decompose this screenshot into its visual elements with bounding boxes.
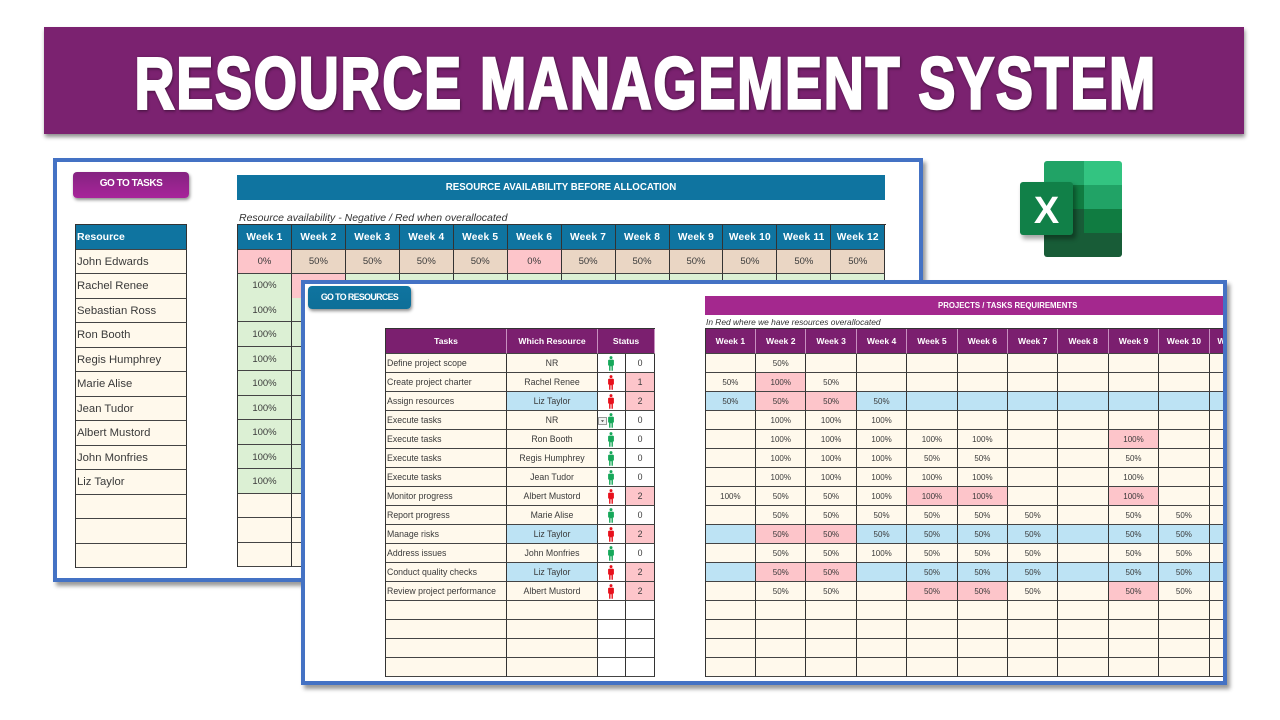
table: weekly task requirements: 50% [1025, 568, 1041, 577]
table: resource names: Resource [77, 231, 125, 243]
table: weekly availability: Week 12 [837, 232, 879, 243]
table: tasks, resources and status: NR [546, 358, 558, 368]
table: weekly availability: Week 10 [729, 232, 771, 243]
table: tasks, resources and status: 0 [638, 358, 642, 368]
table: tasks, resources and status: 0 [638, 453, 642, 463]
table: tasks, resources and status: 2 [638, 586, 642, 596]
table: weekly task requirements: 50% [773, 530, 789, 539]
table: weekly task requirements: Week 9 [1119, 336, 1148, 346]
table: weekly task requirements: 50% [773, 549, 789, 558]
table: weekly task requirements: 50% [773, 511, 789, 520]
table: weekly task requirements: 50% [1126, 530, 1142, 539]
table: weekly availability: 50% [633, 256, 652, 267]
table: weekly task requirements: 50% [823, 378, 839, 387]
table: weekly task requirements: 100% [871, 435, 892, 444]
table: weekly availability lower rows [237, 298, 346, 567]
table: tasks, resources and status: Liz Taylor [534, 396, 570, 406]
table: weekly task requirements: 50% [823, 492, 839, 501]
table: weekly availability: Week 5 [462, 232, 498, 243]
table: weekly task requirements: 100% [1123, 492, 1144, 501]
heading: projects and tasks requirements [705, 296, 1225, 315]
table: weekly availability: 50% [848, 256, 867, 267]
table: weekly task requirements: 100% [771, 416, 791, 425]
table: weekly task requirements: 100% [771, 435, 791, 444]
table: weekly availability: 50% [309, 256, 328, 267]
table: weekly availability: 50% [740, 256, 759, 267]
table: tasks, resources and status: 2 [638, 529, 642, 539]
table: weekly task requirements: 100% [972, 435, 993, 444]
table: weekly task requirements: 100% [871, 454, 892, 463]
table: weekly task requirements: 50% [924, 511, 940, 520]
table: weekly task requirements: 50% [1176, 587, 1192, 596]
table: resource names: Liz Taylor [77, 476, 125, 488]
table: weekly task requirements: 50% [974, 454, 990, 463]
table: weekly availability: Week 9 [678, 232, 714, 243]
table: tasks, resources and status: Monitor progress [387, 491, 453, 501]
table: weekly availability: 50% [363, 256, 382, 267]
table: weekly task requirements: 50% [924, 454, 940, 463]
table: weekly task requirements: 50% [1126, 511, 1142, 520]
table: tasks, resources and status: 0 [638, 415, 642, 425]
table: weekly task requirements: 100% [821, 435, 841, 444]
table: weekly availability: Week 4 [408, 232, 444, 243]
table: weekly availability: Week 11 [783, 232, 825, 243]
table: weekly availability lower rows: 100% [252, 452, 277, 463]
table: weekly task requirements: 50% [924, 530, 940, 539]
table: weekly task requirements: 100% [821, 416, 841, 425]
table: tasks, resources and status: Report progress [387, 510, 450, 520]
table: weekly task requirements: 50% [974, 511, 990, 520]
heading: resource availability before allocation [237, 175, 885, 200]
table: tasks, resources and status: NR [546, 415, 558, 425]
table: weekly task requirements: Week 5 [917, 336, 947, 346]
table: weekly availability: Week 6 [516, 232, 552, 243]
table: resource names [75, 224, 187, 568]
table: tasks, resources and status: 0 [638, 434, 642, 444]
table: weekly availability lower rows: 100% [252, 354, 277, 365]
table: tasks, resources and status: Liz Taylor [534, 529, 570, 539]
table: resource names: John Monfries [77, 452, 148, 464]
table: weekly task requirements: 50% [1126, 587, 1142, 596]
table: tasks, resources and status: Tasks [434, 336, 458, 346]
table: weekly task requirements: 50% [924, 568, 940, 577]
table: tasks, resources and status: Marie Alise [531, 510, 573, 520]
table: weekly availability lower rows: 100% [252, 403, 277, 414]
table: weekly availability lower rows: 100% [252, 305, 277, 316]
table: weekly availability lower rows: 100% [252, 427, 277, 438]
table: tasks, resources and status: Manage risks [387, 529, 439, 539]
table: weekly availability: 50% [471, 256, 490, 267]
title: RESOURCE MANAGEMENT SYSTEM [134, 42, 1157, 124]
table: resource names: Rachel Renee [77, 280, 149, 292]
icon: Excel logo [1019, 161, 1122, 257]
table: resource names: Jean Tudor [77, 403, 134, 415]
table: resource names: Albert Mustord [77, 427, 150, 439]
table: tasks, resources and status: Execute tasks [387, 472, 441, 482]
table: weekly task requirements: 50% [773, 587, 789, 596]
table: weekly task requirements: Week 1 [716, 336, 745, 346]
table: weekly task requirements: 50% [1176, 549, 1192, 558]
table: tasks, resources and status: Assign resources [387, 396, 454, 406]
table: tasks, resources and status: Liz Taylor [534, 567, 570, 577]
table: weekly task requirements: 50% [1126, 454, 1142, 463]
table: weekly task requirements: 100% [972, 492, 993, 501]
table: weekly availability: Week 7 [570, 232, 606, 243]
table: tasks, resources and status: Define project scope [387, 358, 467, 368]
table: tasks, resources and status: Albert Mustord [524, 586, 580, 596]
table: weekly availability: Week 3 [354, 232, 390, 243]
table: tasks, resources and status: Jean Tudor [530, 472, 574, 482]
heading: projects and tasks requirements: PROJECTS / TASKS REQUIREMENTS [938, 301, 1077, 310]
table: weekly task requirements: 100% [771, 473, 791, 482]
table: tasks, resources and status: Which Resource [518, 336, 586, 346]
table: weekly task requirements: 50% [924, 549, 940, 558]
table: weekly task requirements: 100% [871, 549, 892, 558]
table: weekly task requirements: 50% [974, 568, 990, 577]
table: weekly task requirements: Week 2 [766, 336, 796, 346]
table: weekly task requirements: 100% [972, 473, 993, 482]
table: weekly availability: 50% [579, 256, 598, 267]
table: weekly task requirements: Week 4 [867, 336, 896, 346]
table: weekly task requirements: Week 7 [1018, 336, 1047, 346]
icon: dropdown arrow [598, 417, 607, 425]
table: weekly task requirements: 50% [823, 397, 839, 406]
table: weekly task requirements: 50% [773, 492, 789, 501]
table: weekly task requirements: 50% [773, 397, 789, 406]
table: weekly task requirements: 50% [823, 587, 839, 596]
table: weekly task requirements: 50% [823, 511, 839, 520]
table: weekly availability: 50% [686, 256, 705, 267]
table: weekly task requirements: 100% [771, 378, 791, 387]
table: weekly availability: Week 2 [300, 232, 336, 243]
table: tasks, resources and status: John Monfries [525, 548, 579, 558]
table: weekly task requirements: 50% [974, 549, 990, 558]
table: weekly task requirements: Week 8 [1068, 336, 1098, 346]
heading: resource availability before allocation: RESOURCE AVAILABILITY BEFORE ALLOCATION [446, 182, 676, 193]
table: tasks, resources and status: Ron Booth [531, 434, 573, 444]
table: weekly availability: Week 1 [246, 232, 283, 243]
table: weekly task requirements: 100% [1123, 473, 1144, 482]
table: weekly task requirements: Week 3 [816, 336, 846, 346]
table: tasks, resources and status: 0 [638, 548, 642, 558]
table: weekly task requirements: 50% [773, 359, 789, 368]
table: tasks, resources and status: Rachel Renee [524, 377, 580, 387]
table: weekly task requirements: 50% [974, 530, 990, 539]
note: red explanation: In Red where we have resources overallocated [706, 317, 881, 327]
table: tasks, resources and status: Execute tasks [387, 415, 441, 425]
table: weekly task requirements: 50% [974, 587, 990, 596]
table: resource names: Regis Humphrey [77, 354, 161, 366]
table: weekly availability: 0% [527, 256, 541, 267]
table: weekly availability: 100% [252, 280, 277, 291]
table: weekly task requirements: 100% [922, 492, 942, 501]
button: go to resources: GO TO RESOURCES [321, 292, 398, 302]
table: tasks, resources and status: Conduct quality checks [387, 567, 477, 577]
table: weekly task requirements: 100% [821, 454, 841, 463]
table: tasks, resources and status: Status [613, 336, 639, 346]
table: weekly task requirements: 50% [1025, 511, 1041, 520]
table: tasks, resources and status: Execute tasks [387, 434, 441, 444]
table: tasks, resources and status: 0 [638, 472, 642, 482]
table: resource names: Ron Booth [77, 329, 130, 341]
table: weekly task requirements: 50% [1126, 568, 1142, 577]
table: weekly task requirements: 50% [924, 587, 940, 596]
note: availability explanation: Resource availability - Negative / Red when overallocated [239, 212, 507, 224]
table: tasks, resources and status: 0 [638, 510, 642, 520]
table: weekly task requirements: Week 10 [1167, 336, 1201, 346]
table: weekly task requirements: 100% [871, 416, 892, 425]
table: weekly availability: 0% [258, 256, 271, 267]
table: weekly task requirements: 100% [1123, 435, 1144, 444]
button: go to tasks [73, 172, 189, 198]
button: go to resources [308, 286, 411, 309]
table: weekly task requirements: 50% [823, 549, 839, 558]
table: tasks, resources and status [385, 328, 655, 677]
table: tasks, resources and status: Address issues [387, 548, 446, 558]
table: weekly task requirements: 50% [1025, 587, 1041, 596]
table: weekly task requirements: 100% [871, 492, 892, 501]
table: weekly availability lower rows: 100% [252, 378, 277, 389]
table: weekly task requirements: 100% [922, 473, 942, 482]
table: weekly task requirements: 50% [722, 397, 738, 406]
panel: resource availability [53, 158, 923, 582]
table: weekly availability [237, 224, 886, 299]
table: weekly task requirements: 100% [771, 454, 791, 463]
table: weekly task requirements: 50% [1176, 568, 1192, 577]
title banner [44, 27, 1244, 134]
table: weekly task requirements: 50% [1176, 530, 1192, 539]
table: weekly task requirements: 50% [1025, 549, 1041, 558]
panel: projects and tasks [301, 280, 1227, 685]
table: weekly availability: 50% [794, 256, 813, 267]
table: tasks, resources and status: Regis Humphrey [519, 453, 585, 463]
table: tasks, resources and status: 2 [638, 396, 642, 406]
table: weekly task requirements: 100% [720, 492, 741, 501]
table: weekly task requirements: 50% [874, 397, 890, 406]
table: weekly task requirements: 100% [821, 473, 841, 482]
table: resource names: Sebastian Ross [77, 305, 156, 317]
table: weekly task requirements: 50% [722, 378, 738, 387]
icon: Excel logo: X [1034, 190, 1060, 232]
table: tasks, resources and status: 2 [638, 567, 642, 577]
table: weekly task requirements: 100% [922, 435, 942, 444]
table: weekly task requirements: 50% [1126, 549, 1142, 558]
table: weekly availability lower rows: 100% [252, 329, 277, 340]
table: weekly task requirements: 50% [823, 530, 839, 539]
table: tasks, resources and status: Execute tasks [387, 453, 441, 463]
table: weekly task requirements: 50% [1176, 511, 1192, 520]
table: weekly availability: Week 8 [624, 232, 660, 243]
table: resource names: Marie Alise [77, 378, 132, 390]
table: weekly task requirements: 50% [773, 568, 789, 577]
table: weekly task requirements: 50% [874, 530, 890, 539]
table: weekly task requirements: 50% [823, 568, 839, 577]
table: tasks, resources and status: 1 [638, 377, 642, 387]
table: weekly availability: 50% [417, 256, 436, 267]
table: tasks, resources and status: Review project performance [387, 586, 496, 596]
table: resource names: John Edwards [77, 256, 149, 268]
table: weekly task requirements [705, 328, 1265, 677]
table: tasks, resources and status: Albert Mustord [524, 491, 580, 501]
table: weekly task requirements: Week 6 [968, 336, 997, 346]
table: weekly task requirements: 100% [871, 473, 892, 482]
table: weekly availability lower rows: 100% [252, 476, 277, 487]
table: tasks, resources and status: 2 [638, 491, 642, 501]
table: tasks, resources and status: Create project charter [387, 377, 472, 387]
table: weekly task requirements: 50% [1025, 530, 1041, 539]
table: weekly task requirements: 50% [874, 511, 890, 520]
button: go to tasks: GO TO TASKS [100, 178, 162, 189]
